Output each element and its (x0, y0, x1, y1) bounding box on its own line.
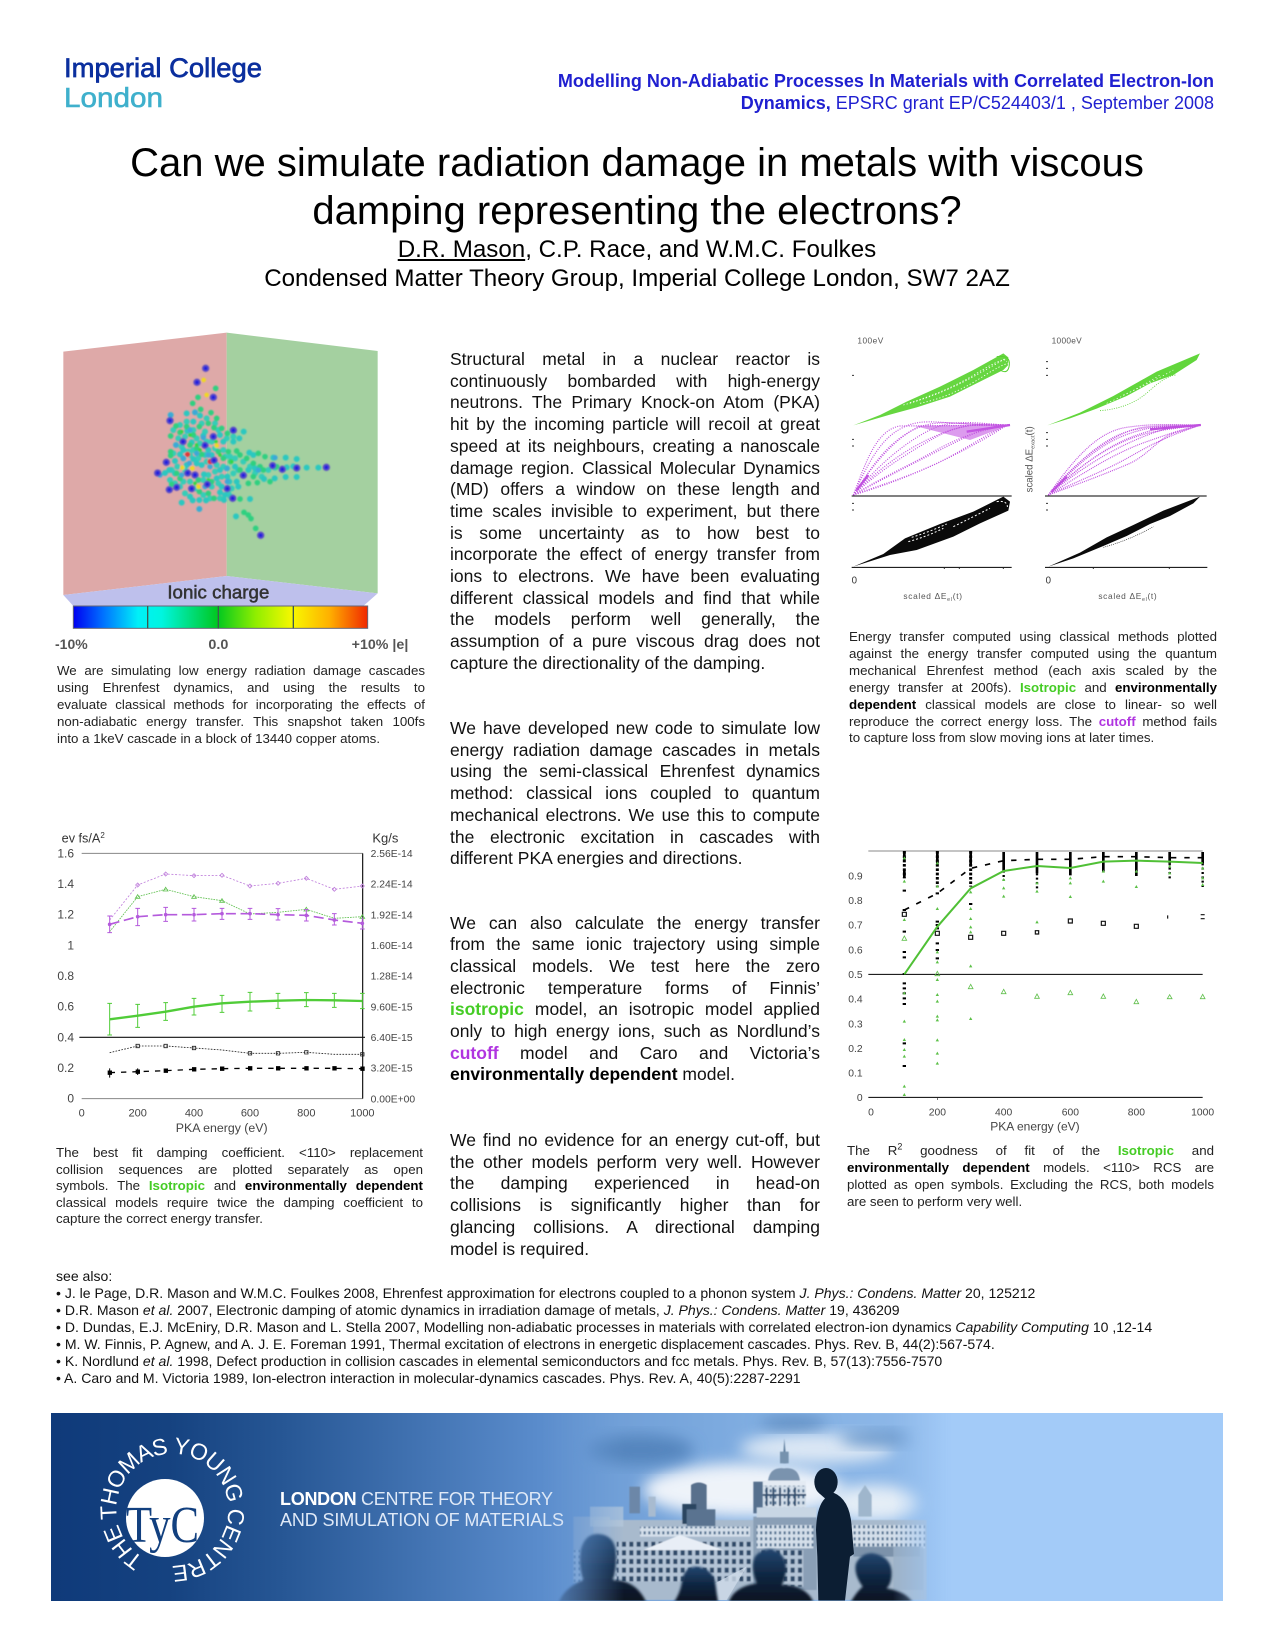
banner: Thomas Young Centre (51, 1413, 1223, 1601)
title (130, 141, 1144, 233)
x axis labels: PKA energy (eV) (990, 1120, 1080, 1134)
y axis labels (848, 871, 863, 1104)
grant reference header: Modelling Non-Adiabatic Processes In Materials with Correlated Electron-Ion (558, 71, 1214, 91)
y axis labels: 0.1 (848, 1069, 863, 1080)
y axis labels: 0.7 (848, 921, 863, 932)
caption: goodness of fit (847, 1142, 1214, 1209)
main text: paragraph 4: We find no evidence for an energy cut-off, but (450, 1130, 820, 1150)
main text: paragraph 1: ions to electrons. We have been evaluating (450, 566, 820, 586)
solid line: isotropic mean (904, 861, 1203, 974)
main text: paragraph 2: different PKA energies and directions. (450, 848, 743, 868)
main text: paragraph 3: electronic temperature forms of Finnis’ (450, 978, 820, 998)
x axis labels (868, 1107, 1214, 1134)
panel labels: (t) (1024, 426, 1035, 435)
axis units (62, 831, 399, 846)
scale labels: 0.0 (208, 637, 229, 652)
main text: paragraph 3: We can also calculate the energy transfer (450, 912, 820, 932)
atoms (158, 368, 326, 535)
series: isotropic RCS open triangles (110, 887, 365, 932)
y axis labels: 0.5 (848, 970, 863, 981)
main text: paragraph 4: the damping experienced in head-on (450, 1173, 820, 1193)
scale labels: +10% |e| (352, 637, 408, 652)
left axis labels: 0.2 (57, 1061, 74, 1075)
panel labels: exact (1030, 435, 1036, 449)
main text: paragraph 3: from the same ionic trajectory using simple (450, 934, 820, 954)
right axis labels: 3.20E-15 (371, 1064, 413, 1075)
axes (852, 496, 1012, 567)
scatter: isotropic points (903, 856, 1204, 1096)
caption: cascade snapshot (57, 663, 425, 746)
banner tagline: LONDON CENTRE FOR THEORY (280, 1489, 553, 1509)
series: environmentally dependent RCS open squares (110, 1044, 364, 1056)
authors and affiliation: Condensed Matter Theory Group, Imperial College London, SW7 2AZ (264, 265, 1010, 292)
main text: paragraph 2: using the semi-classical Ehrenfest dynamics (450, 761, 820, 781)
series: environmentally dependent filled squares (108, 1068, 365, 1078)
main text: paragraph 1: continuously bombarded with high-energy (450, 371, 820, 391)
caption: goodness of fit: are seen to perform very well. (847, 1194, 1022, 1209)
series: isotropic model with error bars (107, 992, 365, 1035)
x axis labels: 0 (868, 1107, 874, 1118)
caption: energy transfer: dependent classical models are close to linear- so well (849, 697, 1217, 712)
axis units: Kg/s (372, 831, 399, 846)
right axis labels: 2.24E-14 (371, 880, 413, 891)
references: • M. W. Finnis, P. Agnew, and A. J. E. Foreman 1991, Thermal excitation of electrons in energetic displacement cascades. Phys. Rev. B, 44(2):567-574. (56, 1336, 995, 1352)
main text: paragraph 2 (450, 718, 820, 868)
panel labels (852, 336, 1157, 603)
axes (868, 851, 1203, 1100)
left axis labels: 1.4 (57, 877, 74, 891)
main text: paragraph 1: the models perform well generally, the (450, 609, 820, 629)
right axis labels: 1.28E-14 (371, 972, 413, 983)
y axis labels: 0.4 (848, 995, 863, 1006)
cutoff scatter 100eV (853, 422, 1010, 495)
panel: 1000eV scatter (1045, 353, 1207, 569)
scale labels: -10% (55, 637, 88, 652)
grant reference header (558, 71, 1214, 113)
banner tagline (280, 1489, 564, 1530)
main text: paragraph 1: assumption of a pure viscous drag does not (450, 631, 820, 651)
left axis labels: 0 (67, 1092, 74, 1106)
caption: damping coefficient: symbols. The Isotropic and environmentally dependent (56, 1178, 423, 1193)
panel labels: (t) (953, 591, 962, 601)
panel labels: el (1142, 597, 1147, 603)
main text: paragraph 1: Structural metal in a nuclear reactor is (450, 349, 820, 369)
main text: paragraph 1: is some uncertainty as to how best to (450, 523, 820, 543)
caption: energy transfer: energy transfer at 200fs). Isotropic and environmentally (849, 680, 1217, 695)
x axis labels: 200 (128, 1108, 147, 1120)
main text: paragraph 3: cutoff model and Caro and Victoria’s (450, 1043, 820, 1063)
main text: paragraph 3 (450, 912, 820, 1084)
scatter: environmentally dependent points (903, 851, 1203, 1066)
references: • D. Dundas, E.J. McEniry, D.R. Mason and L. Stella 2007, Modelling non-adiabatic processes in materials with correlated electron-ion dynamics Capability Computing 10 ,12-14 (56, 1319, 1152, 1335)
y axis labels: 0.9 (848, 871, 863, 882)
main text: paragraph 1: capture the directionality of the damping. (450, 653, 765, 673)
main text: paragraph 1: time scales invisible to experiment, but there (450, 501, 820, 521)
chart: R squared goodness of fit (848, 850, 1214, 1134)
authors and affiliation (264, 236, 1010, 292)
caption: damping coefficient: capture the correct energy transfer. (56, 1211, 263, 1226)
main text: paragraph 1: different classical models and find that while (450, 588, 820, 608)
x axis labels: 400 (185, 1108, 203, 1120)
main text: paragraph 4: the other models perform very well. However (450, 1152, 820, 1172)
axis units: 2 (100, 831, 105, 840)
main text: paragraph 1: neutrons. The Primary Knock-on Atom (PKA) (450, 392, 820, 412)
caption: damping coefficient: classical models require twice the damping coefficient to (56, 1195, 423, 1210)
references: • D.R. Mason et al. 2007, Electronic damping of atomic dynamics in irradiation damage of metals, J. Phys.: Condens. Matter 19, 436209 (56, 1302, 900, 1318)
references: • A. Caro and M. Victoria 1989, Ion-electron interaction in molecular-dynamics cascades. Phys. Rev. A, 40(5):2287-2291 (56, 1370, 801, 1386)
x axis labels: 800 (1128, 1107, 1145, 1118)
references (56, 1268, 1152, 1386)
y axis labels: 0.6 (848, 945, 863, 956)
main text: paragraph 1: speed at its neighbours, creating a nanoscale (450, 436, 820, 456)
panel labels: 100eV (857, 336, 884, 346)
caption: cascade snapshot: into a 1keV cascade in a block of 13440 copper atoms. (57, 731, 380, 746)
figure: damage cascade snapshot with ionic charge scale (55, 332, 408, 652)
main text: paragraph 4: collisions is significantly higher than for (450, 1195, 820, 1215)
main text: paragraph 3: classical models. We test here the zero (450, 956, 820, 976)
axes (1045, 496, 1207, 567)
environmentally dependent scatter 1000eV (1048, 497, 1200, 567)
caption: cascade snapshot: using Ehrenfest dynamics, and using the results to (57, 680, 425, 695)
caption: energy transfer: Energy transfer computed using classical methods plotted (849, 629, 1217, 644)
main text: paragraph 1 (450, 349, 820, 673)
main text: paragraph 1: incorporate the effect of energy transfer from (450, 544, 820, 564)
St Paul's dome (757, 1438, 817, 1517)
y axis labels: 0 (857, 1093, 863, 1104)
main text: paragraph 4 (450, 1130, 820, 1259)
title: Can we simulate radiation damage in metals with viscous (130, 141, 1144, 185)
chart: best fit damping coefficient (57, 831, 415, 1135)
series: cutoff RCS open diamonds (110, 872, 364, 920)
silhouettes: audience (558, 1534, 913, 1603)
right axis labels: 0.00E+00 (371, 1094, 415, 1105)
x axis labels: PKA energy (eV) (176, 1121, 268, 1135)
main text: paragraph 3: environmentally dependent model. (450, 1064, 735, 1084)
caption: energy transfer: reproduce the correct energy loss. The cutoff method fails (849, 714, 1217, 729)
references: see also: (56, 1268, 112, 1284)
dashed line: environmentally dependent mean (904, 857, 1203, 910)
caption: goodness of fit: The R2 goodness of fit of the Isotropic and (847, 1142, 1214, 1158)
right axis labels: 9.60E-15 (371, 1002, 413, 1013)
left axis labels: 1 (67, 938, 74, 952)
left axis labels: 0.4 (57, 1030, 74, 1044)
right axis labels: 6.40E-15 (371, 1033, 413, 1044)
main text: paragraph 1: damage region. Classical Molecular Dynamics (450, 458, 820, 478)
simulation box walls (63, 333, 378, 606)
main text: paragraph 2: mechanical electrons. We use this to compute (450, 805, 820, 825)
scatter: environmentally dependent RCS open squares (902, 912, 1205, 939)
right axis labels: 1.92E-14 (371, 910, 413, 921)
caption: energy transfer: against the energy transfer computed using the quantum (849, 646, 1217, 661)
photo: London skyline with silhouettes (556, 1414, 927, 1601)
ring text: THE THOMAS YOUNG CENTRE (100, 1438, 244, 1582)
x axis labels: 400 (995, 1107, 1013, 1118)
main text: paragraph 2: energy radiation damage cascades in metals (450, 740, 820, 760)
left axis labels (57, 846, 74, 1106)
bridge (714, 1567, 746, 1600)
caption: energy transfer: mechanical Ehrenfest method (each axis scaled by the (849, 663, 1217, 678)
authors and affiliation: D.R. Mason, C.P. Race, and W.M.C. Foulkes (398, 236, 876, 263)
x axis labels (79, 1108, 375, 1135)
caption: energy transfer (849, 629, 1217, 745)
y axis labels: 0.2 (848, 1044, 863, 1055)
panel labels: (t) (1147, 591, 1157, 601)
ionic charge label: Ionic charge (167, 581, 269, 602)
references: • K. Nordlund et al. 1998, Defect production in collision cascades in elemental semiconductors and fcc metals. Phys. Rev. B, 57(13):7556-7570 (56, 1353, 942, 1369)
caption: damping coefficient (56, 1145, 423, 1226)
cutoff scatter 1000eV (1048, 425, 1201, 495)
logo: TyC emblem with ring text (100, 1438, 244, 1582)
main text: paragraph 2: the electronic excitation in cascades with (450, 827, 820, 847)
silhouette: standing figure (814, 1468, 854, 1601)
caption: damping coefficient: collision sequences are plotted separately as open (56, 1162, 423, 1177)
logo: Imperial College London (64, 53, 262, 113)
x axis labels: 200 (929, 1107, 946, 1118)
y axis labels: 0.3 (848, 1019, 863, 1030)
caption: cascade snapshot: We are simulating low energy radiation damage cascades (57, 663, 425, 678)
sky and clouds (556, 1414, 926, 1600)
grant reference header: Dynamics, EPSRC grant EP/C524403/1 , September 2008 (741, 93, 1214, 113)
x axis labels: 600 (1062, 1107, 1079, 1118)
main text: paragraph 3: isotropic model, an isotropic model applied (450, 999, 820, 1019)
caption: damping coefficient: The best fit damping coefficient. <110> replacement (56, 1145, 423, 1160)
left axis labels: 0.6 (57, 1000, 74, 1014)
axes (79, 853, 365, 1099)
caption: cascade snapshot: evaluate classical methods for incorporating the effects of (57, 697, 425, 712)
panel labels: 0 (1046, 575, 1051, 586)
right axis labels: 2.56E-14 (371, 849, 413, 860)
caption: cascade snapshot: non-adiabatic energy transfer. This snapshot taken 100fs (57, 714, 425, 729)
figure: energy transfer scatter panels (852, 336, 1208, 603)
main text: paragraph 4: glancing collisions. A directional damping (450, 1217, 820, 1237)
main text: paragraph 2: method: classical ions coupled to quantum (450, 783, 820, 803)
panel labels: 1000eV (1052, 336, 1082, 346)
scatter: isotropic RCS open triangles (902, 936, 1205, 1004)
x axis labels: 0 (79, 1108, 85, 1120)
panel labels: el (947, 597, 952, 603)
isotropic scatter 100eV (853, 353, 1009, 425)
right axis labels: 1.60E-14 (371, 941, 413, 952)
left axis labels: 1.2 (57, 908, 74, 922)
main text: paragraph 3: only to high energy ions, such as Nordlund’s (450, 1021, 820, 1041)
main text: paragraph 4: model is required. (450, 1239, 589, 1259)
panel: 100eV scatter (852, 353, 1012, 569)
main text: paragraph 2: We have developed new code to simulate low (450, 718, 820, 738)
left axis labels: 1.6 (57, 846, 74, 860)
left axis labels: 0.8 (57, 969, 74, 983)
panel labels: scaled ΔE (903, 591, 946, 601)
references: • J. le Page, D.R. Mason and W.M.C. Foulkes 2008, Ehrenfest approximation for electrons coupled to a phonon system J. Phys.: Condens. Matter 20, 125212 (56, 1285, 1035, 1301)
banner tagline: AND SIMULATION OF MATERIALS (280, 1510, 564, 1530)
colour bar (73, 606, 368, 628)
series: cutoff model with error bars (107, 907, 365, 933)
title: damping representing the electrons? (312, 189, 962, 233)
panel labels: scaled ΔE (1098, 591, 1141, 601)
logo: Imperial College London: London (64, 82, 163, 113)
x axis labels: 1000 (1191, 1107, 1214, 1118)
panel labels: scaled ΔE (1024, 449, 1035, 492)
environmentally dependent scatter 100eV (853, 497, 1010, 567)
x axis labels: 800 (297, 1108, 316, 1120)
right axis labels (371, 849, 415, 1105)
emblem letters: TyC (126, 1497, 199, 1554)
panel labels: 0 (852, 575, 857, 586)
scale labels (55, 637, 408, 652)
isotropic scatter 1000eV (1047, 353, 1200, 425)
main text: paragraph 1: (MD) offers a window on these length and (450, 479, 820, 499)
logo: Imperial College London: Imperial College (64, 53, 262, 83)
x axis labels: 600 (241, 1108, 259, 1120)
caption: goodness of fit: plotted as open symbols. Excluding the RCS, both models (847, 1177, 1214, 1192)
city buildings (573, 1482, 927, 1600)
axis units: ev fs/A (62, 832, 100, 846)
x axis labels: 1000 (350, 1108, 375, 1120)
y axis labels: 0.8 (848, 896, 863, 907)
caption: goodness of fit: environmentally dependent models. <110> RCS are (847, 1160, 1214, 1175)
main text: paragraph 1: hit by the incoming particle will recoil at great (450, 414, 820, 434)
caption: energy transfer: to capture loss from slow moving ions at later times. (849, 730, 1154, 745)
